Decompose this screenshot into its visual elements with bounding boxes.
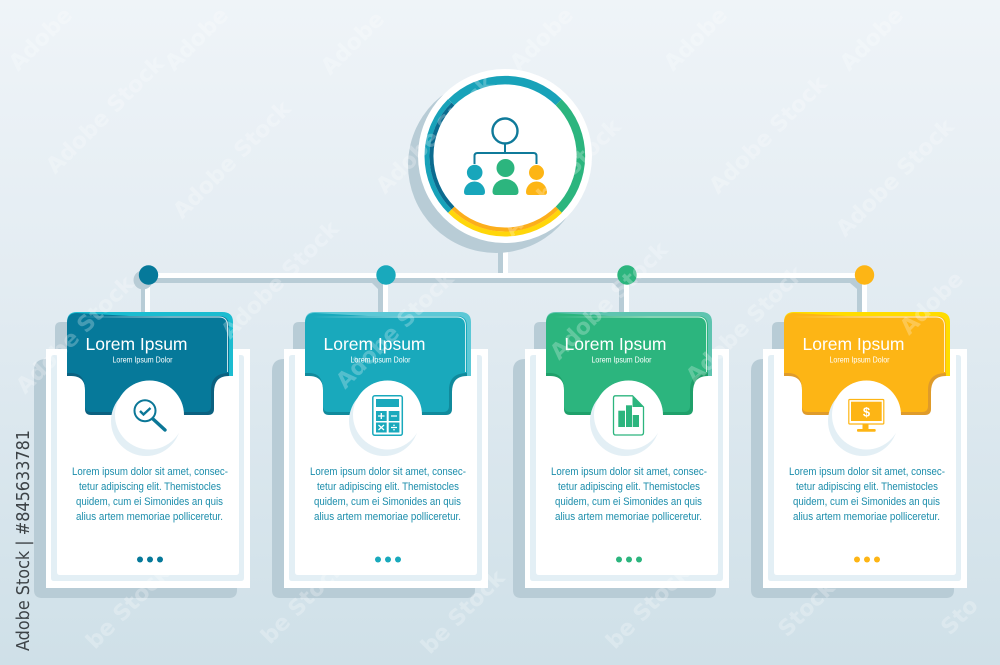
watermark pattern: Stock <box>774 575 841 642</box>
watermark pattern: Adobe Stock <box>42 51 170 179</box>
tab highlight <box>792 317 944 372</box>
card body <box>763 349 967 588</box>
tab face <box>784 313 946 412</box>
tab face <box>546 313 708 412</box>
watermark pattern: Adobe <box>896 267 969 340</box>
heading: Lorem Ipsum <box>564 334 666 354</box>
hub shadow <box>408 77 584 253</box>
tab dark edge <box>305 340 467 415</box>
watermark pattern: be Stock <box>257 555 351 649</box>
watermark pattern: Adobe Stock <box>169 96 297 224</box>
icon disc <box>115 380 184 450</box>
heading: Lorem Ipsum <box>324 334 426 354</box>
body text: Lorem ipsum dolor sit amet, consec- <box>789 466 945 478</box>
panel: card 3 <box>513 312 729 598</box>
icon disc shadow <box>590 386 660 456</box>
watermark pattern: Adobe Stock <box>705 71 833 199</box>
tab back edge <box>546 312 712 376</box>
card shadow <box>34 322 237 598</box>
body text <box>551 466 707 523</box>
heading: Lorem Ipsum <box>86 334 188 354</box>
card body <box>284 349 488 588</box>
hub white disc <box>418 69 592 243</box>
icon disc <box>594 380 663 450</box>
icon: document with bar chart <box>614 396 644 435</box>
panel: card 2 <box>272 312 488 598</box>
card body <box>46 349 250 588</box>
connector node dots <box>134 265 874 290</box>
tab dark edge <box>67 340 229 415</box>
watermark pattern: Adobe <box>506 3 579 76</box>
subheading: Lorem Ipsum Dolor <box>830 356 890 364</box>
stock id label: Adobe Stock | #845633781 <box>13 430 34 651</box>
watermark pattern: Adobe <box>660 3 733 76</box>
tab highlight <box>313 317 466 372</box>
connector lines <box>141 240 867 314</box>
hub ring <box>427 80 581 234</box>
body text: quidem, cum ei Simonides an quis <box>76 496 223 508</box>
body text <box>789 466 945 523</box>
pagination dots <box>616 556 642 562</box>
tab highlight <box>75 317 228 372</box>
body text: Lorem ipsum dolor sit amet, consec- <box>551 466 707 478</box>
tab highlight <box>554 317 706 372</box>
heading: Lorem Ipsum <box>802 334 904 354</box>
body text: alius artem memoriae polliceretur. <box>76 511 223 523</box>
body text: alius artem memoriae polliceretur. <box>314 511 461 523</box>
watermark pattern: Adobe <box>5 3 78 76</box>
body text: quidem, cum ei Simonides an quis <box>555 496 702 508</box>
watermark pattern: Sto <box>937 593 984 640</box>
icon disc shadow <box>111 386 181 456</box>
watermark pattern: Adobe Stock <box>332 266 460 394</box>
icon disc <box>832 380 901 450</box>
card inner frame <box>530 355 723 581</box>
body text: tetur adipiscing elit. Themistocles <box>317 481 459 493</box>
watermark pattern: Adobe Stock <box>372 71 500 199</box>
watermark pattern: Adobe Stock <box>12 271 140 399</box>
watermark pattern: Adobe Stock <box>682 261 810 389</box>
icon: organisation hierarchy <box>464 118 547 195</box>
watermark pattern: Adobe <box>836 3 909 76</box>
icon: monitor with dollar <box>849 400 884 432</box>
tab dark edge <box>784 340 946 415</box>
body text <box>310 466 466 523</box>
watermark pattern: Adobe Stock <box>217 216 345 344</box>
card inner frame <box>51 355 244 581</box>
card inner frame <box>768 355 961 581</box>
watermark pattern: Adobe <box>317 7 390 80</box>
central hub circle <box>408 69 592 253</box>
watermark pattern: be Stock <box>602 560 696 654</box>
tab face <box>67 313 229 412</box>
watermark pattern: Adobe <box>161 3 234 76</box>
card shadow <box>751 322 954 598</box>
subheading: Lorem Ipsum Dolor <box>350 356 411 364</box>
panel: card 1 <box>34 312 250 598</box>
watermark pattern: Adobe Stock <box>499 114 627 242</box>
body text: quidem, cum ei Simonides an quis <box>793 496 940 508</box>
tab back edge <box>784 312 950 376</box>
panel: card 4 <box>751 312 967 598</box>
card inner frame <box>289 355 482 581</box>
body text <box>72 466 228 523</box>
icon disc <box>353 380 422 450</box>
pagination dots <box>854 556 880 562</box>
watermark pattern: be Stock <box>82 560 176 654</box>
icon disc shadow <box>349 386 419 456</box>
body text: alius artem memoriae polliceretur. <box>555 511 702 523</box>
icon: magnifier with check <box>134 400 165 430</box>
body text: Lorem ipsum dolor sit amet, consec- <box>72 466 228 478</box>
subheading: Lorem Ipsum Dolor <box>592 356 652 364</box>
pagination dots <box>137 556 163 562</box>
card shadow <box>272 322 475 598</box>
tab back edge <box>305 312 471 376</box>
pagination dots <box>375 556 401 562</box>
icon disc shadow <box>828 386 898 456</box>
body text: tetur adipiscing elit. Themistocles <box>79 481 221 493</box>
body text: quidem, cum ei Simonides an quis <box>314 496 461 508</box>
watermark pattern: Adobe Stock <box>546 237 674 365</box>
card body <box>525 349 729 588</box>
watermark pattern: be Stock <box>417 565 511 659</box>
body text: Lorem ipsum dolor sit amet, consec- <box>310 466 466 478</box>
icon: monitor with dollar: $ <box>863 404 871 420</box>
body text: tetur adipiscing elit. Themistocles <box>558 481 700 493</box>
subheading: Lorem Ipsum Dolor <box>112 356 173 364</box>
body text: alius artem memoriae polliceretur. <box>793 511 940 523</box>
icon: calculator <box>373 396 402 435</box>
watermark pattern: Adobe Stock <box>832 114 960 242</box>
body text: tetur adipiscing elit. Themistocles <box>796 481 938 493</box>
card shadow <box>513 322 716 598</box>
tab face <box>305 313 467 412</box>
tab back edge <box>67 312 233 376</box>
tab dark edge <box>546 340 708 415</box>
